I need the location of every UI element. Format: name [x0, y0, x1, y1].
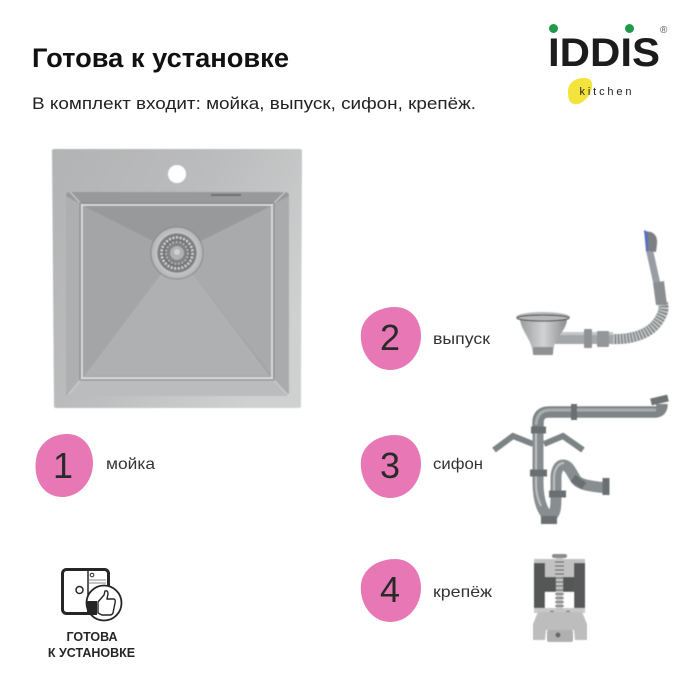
logo: IDDIS kitchen: IDDIS [548, 31, 660, 75]
clip screw spring [556, 556, 563, 611]
badge 4: 4 [380, 569, 400, 610]
logo: IDDIS kitchen [548, 24, 668, 104]
label: крепёж: крепёж [433, 584, 492, 601]
mounting clip [533, 554, 587, 642]
flange [516, 312, 570, 322]
flexible hose [610, 303, 664, 339]
badge 3: 3 [380, 445, 400, 486]
icon caption: ГОТОВА [66, 630, 118, 644]
vertical pipe and U-trap [538, 430, 607, 516]
label: выпуск: выпуск [433, 331, 491, 348]
logo: IDDIS kitchen: kitchen [580, 86, 632, 98]
sink [52, 149, 302, 408]
icon: sink outline [62, 570, 108, 614]
drain strainer [151, 227, 203, 279]
title: Готова к установке [32, 43, 289, 73]
badge 1 [36, 434, 93, 497]
ready-to-install icon [48, 569, 135, 660]
subtitle: В комплект входит: мойка, выпуск, сифон, крепёж. [32, 94, 476, 113]
siphon assembly [494, 398, 668, 520]
badge 4 [361, 559, 421, 622]
badge 2 [361, 307, 421, 370]
badge 1: 1 [53, 445, 73, 486]
main horizontal pipe [538, 404, 662, 432]
left hose spigot [494, 436, 533, 450]
overflow head [644, 231, 657, 252]
collars [530, 404, 606, 520]
logo: IDDIS kitchen: ® [660, 25, 668, 36]
icon: thumbs up [86, 586, 122, 620]
icon caption: К УСТАНОВКЕ [48, 646, 135, 660]
badge 2: 2 [380, 317, 400, 358]
outlet drain assembly [516, 230, 667, 355]
right hose spigot [544, 436, 583, 450]
badge 3 [361, 435, 421, 498]
tap hole [168, 165, 186, 183]
horizontal pipe [555, 332, 613, 344]
clip bottom plate [533, 612, 587, 640]
clip upper frame [534, 559, 585, 613]
funnel body [520, 320, 567, 354]
basin [66, 192, 289, 396]
label: сифон: сифон [433, 456, 483, 473]
overflow tube [649, 248, 657, 284]
right elbow collar [651, 398, 668, 402]
label: мойка: мойка [106, 456, 155, 473]
sink top plate [52, 149, 302, 408]
